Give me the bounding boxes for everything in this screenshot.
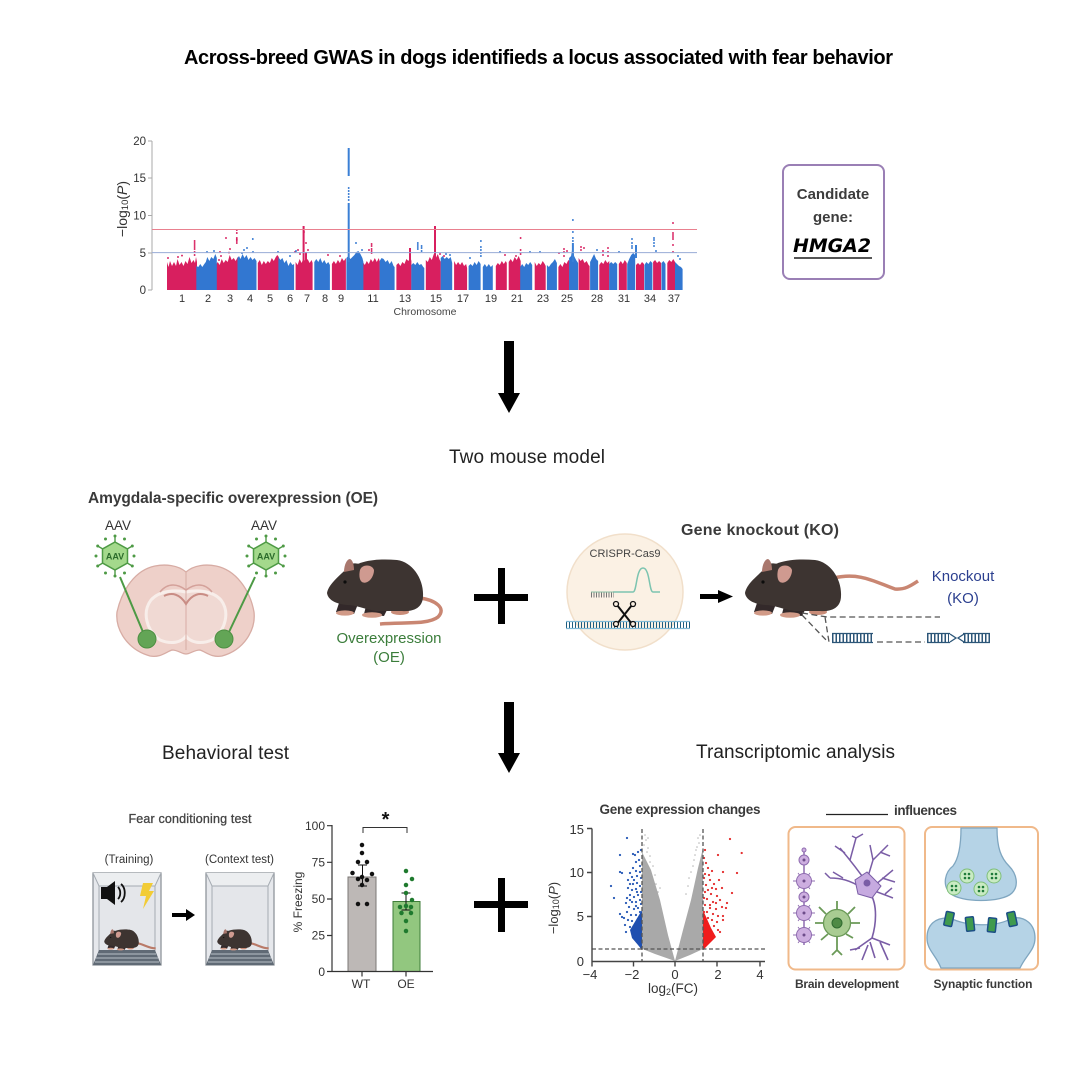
bar chart axes	[327, 825, 433, 976]
Manhattan y label: (	[114, 195, 130, 200]
Manhattan chromosome labels: 17	[457, 293, 469, 305]
chart: Manhattan plot	[114, 136, 697, 318]
icon: vesicles	[947, 869, 1001, 896]
Manhattan even chromosomes skyline	[196, 246, 683, 290]
label: right AAV: AAV	[251, 518, 277, 533]
Manhattan chromosome labels: 9	[338, 293, 344, 305]
bar: OE	[393, 902, 420, 972]
significance bracket	[363, 828, 407, 833]
Manhattan chromosome labels: 21	[511, 293, 523, 305]
icon: KO mouse	[745, 559, 918, 618]
volcano tick labels: 5	[577, 909, 584, 924]
chart: Manhattan plot: 20	[133, 136, 146, 148]
Manhattan threshold lines	[152, 230, 697, 253]
volcano x tick labels: −2	[625, 967, 639, 982]
arrow: GWAS to mouse models	[498, 341, 520, 413]
error bars	[358, 865, 410, 910]
Manhattan chromosome labels: 25	[561, 293, 573, 305]
heading: behavioral test: Behavioral test	[162, 743, 290, 764]
bar chart tick labels	[305, 819, 325, 979]
Manhattan chromosome labels: 19	[485, 293, 497, 305]
volcano y label: −log	[546, 909, 561, 934]
volcano x tick labels	[583, 967, 764, 982]
volcano x tick labels: 4	[756, 967, 764, 982]
label: context test: (Context test)	[205, 854, 274, 866]
Manhattan blue dots	[207, 188, 680, 259]
volcano non-significant points	[640, 848, 703, 961]
Manhattan y axis	[148, 141, 152, 290]
volcano tick labels	[570, 822, 584, 969]
heading: KO: Gene knockout (KO)	[681, 522, 839, 539]
arrow: mouse models to tests	[498, 702, 520, 773]
label: overexpression: Overexpression	[336, 630, 442, 647]
icon: training mouse	[104, 929, 156, 950]
Manhattan chromosome labels: 37	[668, 293, 680, 305]
Manhattan x label: Chromosome	[393, 306, 457, 318]
label: AAV inside right virus: AAV	[257, 552, 275, 562]
volcano x label: 2	[666, 987, 671, 997]
icon: green glial cell	[815, 901, 860, 955]
label: OE: OE	[397, 977, 415, 991]
arrow: CRISPR to knockout mouse	[700, 590, 733, 603]
chart: Manhattan plot: 15	[133, 173, 146, 185]
label: knockout: Knockout	[932, 568, 995, 585]
icon: left AAV virus	[96, 536, 134, 576]
label: left AAV: AAV	[105, 518, 131, 533]
WT data points	[352, 845, 372, 904]
Manhattan red dots	[168, 223, 673, 260]
icon: postsynaptic terminal	[927, 918, 1035, 968]
Manhattan chromosome labels: 34	[644, 293, 656, 305]
icon: left injection	[120, 577, 156, 648]
label: brain development: Brain development	[795, 977, 899, 991]
chart: volcano plot	[546, 802, 765, 997]
panel: brain development	[788, 827, 904, 970]
bar chart tick labels: 0	[318, 965, 325, 979]
bar: WT	[348, 877, 376, 972]
Manhattan chromosome labels: 13	[399, 293, 411, 305]
volcano y label: (	[546, 894, 561, 899]
volcano tick labels: 15	[570, 822, 584, 837]
volcano x tick labels: −4	[583, 967, 597, 982]
label: synaptic function: Synaptic function	[934, 977, 1032, 991]
volcano title: Gene expression changes	[600, 802, 760, 817]
callout: candidate gene: gene:	[813, 209, 853, 226]
icon: brain section	[117, 565, 254, 656]
callout: candidate gene: Candidate	[797, 186, 869, 203]
icon: progenitor cell stack	[793, 848, 815, 945]
volcano y label: P)	[546, 882, 561, 895]
Manhattan y label: 10	[120, 200, 131, 210]
Manhattan chromosome labels: 2	[205, 293, 211, 305]
volcano grey scatter	[644, 835, 700, 894]
icon: dashed zoom lines and DNA	[802, 613, 990, 642]
panel: fear conditioning test	[93, 812, 274, 965]
callout: candidate gene	[783, 165, 884, 279]
panel: influences	[788, 803, 1038, 991]
volcano y label: 10	[551, 899, 561, 909]
label: OE: (OE)	[373, 649, 405, 666]
Manhattan chromosome labels: 4	[247, 293, 253, 305]
volcano threshold lines	[592, 829, 765, 961]
chart: Manhattan plot: 10	[133, 210, 146, 222]
heading: transcriptomic analysis: Transcriptomic analysis	[696, 742, 895, 763]
bar chart tick labels: 75	[312, 856, 325, 870]
panel: gene knockout	[566, 522, 995, 650]
volcano red points	[703, 839, 742, 950]
chart: Manhattan plot: 0	[140, 285, 146, 297]
icon: lightning	[140, 883, 154, 909]
Manhattan chromosome labels: 8	[322, 293, 328, 305]
bar chart tick labels: 25	[312, 928, 325, 942]
Manhattan chromosome labels: 31	[618, 293, 630, 305]
Manhattan chromosome labels: 23	[537, 293, 549, 305]
icon: purple neuron	[825, 834, 895, 960]
icon: right injection	[215, 577, 255, 648]
volcano tick labels: 0	[577, 954, 584, 969]
icon: training chamber	[93, 873, 161, 965]
icon: presynaptic terminal	[945, 828, 1016, 900]
icon: receptors	[944, 911, 1017, 932]
label: AAV inside left virus: AAV	[106, 552, 124, 562]
icon: CRISPR circle: CRISPR-Cas9	[590, 548, 660, 560]
significance star: *	[382, 809, 390, 831]
volcano x tick labels: 2	[714, 967, 722, 982]
bar chart tick labels: 100	[305, 819, 325, 833]
arrow: training to context	[172, 909, 195, 921]
icon: context mouse	[217, 929, 269, 950]
chart: freezing bar chart	[291, 809, 433, 991]
Manhattan y label: −log	[114, 210, 130, 237]
label: KO: (KO)	[947, 590, 979, 607]
chart: Manhattan plot: 5	[140, 248, 146, 260]
volcano x label: log	[648, 981, 666, 996]
Manhattan y label: P)	[114, 181, 130, 195]
label: influences: influences	[894, 803, 957, 818]
OE data points	[400, 871, 412, 931]
Manhattan chromosome labels: 15	[430, 293, 442, 305]
Manhattan chromosome 7 and 15 peaks	[304, 226, 435, 264]
volcano axes	[587, 828, 765, 966]
Manhattan chromosome labels	[179, 293, 680, 305]
callout: candidate gene: HMGA2	[793, 235, 871, 257]
bar chart y label: % Freezing	[291, 872, 305, 932]
title: Across-breed GWAS in dogs identifieds a locus associated with fear behavior	[184, 47, 893, 69]
panel: synaptic function	[925, 827, 1038, 970]
icon: plus between analyses	[474, 878, 528, 932]
icon: plus between mouse models	[474, 568, 528, 624]
Manhattan chromosome labels: 11	[367, 293, 379, 305]
heading: two mouse model: Two mouse model	[449, 447, 605, 468]
icon: CRISPR circle	[566, 534, 690, 650]
icon: context chamber	[206, 873, 274, 965]
bar chart tick labels: 50	[312, 892, 325, 906]
volcano x tick labels: 0	[671, 967, 679, 982]
Manhattan chromosome labels: 7	[304, 293, 310, 305]
volcano x label: (FC)	[671, 981, 698, 996]
Manhattan odd chromosomes skyline	[167, 254, 675, 290]
Manhattan chromosome labels: 6	[287, 293, 293, 305]
volcano blue points	[611, 838, 642, 950]
icon: OE mouse	[327, 559, 441, 624]
icon: right AAV virus	[247, 536, 285, 576]
Manhattan chromosome 10 peak	[349, 148, 636, 262]
Manhattan chromosome labels: 3	[227, 293, 233, 305]
label: training: (Training)	[105, 854, 154, 866]
label: WT: WT	[352, 977, 371, 991]
heading: OE: Amygdala-specific overexpression (OE)	[88, 490, 378, 507]
heading: fear conditioning: Fear conditioning test	[128, 812, 252, 826]
Manhattan chromosome labels: 1	[179, 293, 185, 305]
icon: speaker	[101, 881, 125, 905]
volcano tick labels: 10	[570, 865, 584, 880]
Manhattan chromosome labels: 28	[591, 293, 603, 305]
Manhattan chromosome labels: 5	[267, 293, 273, 305]
blank line	[826, 814, 888, 816]
panel: amygdala-specific overexpression	[88, 490, 442, 666]
